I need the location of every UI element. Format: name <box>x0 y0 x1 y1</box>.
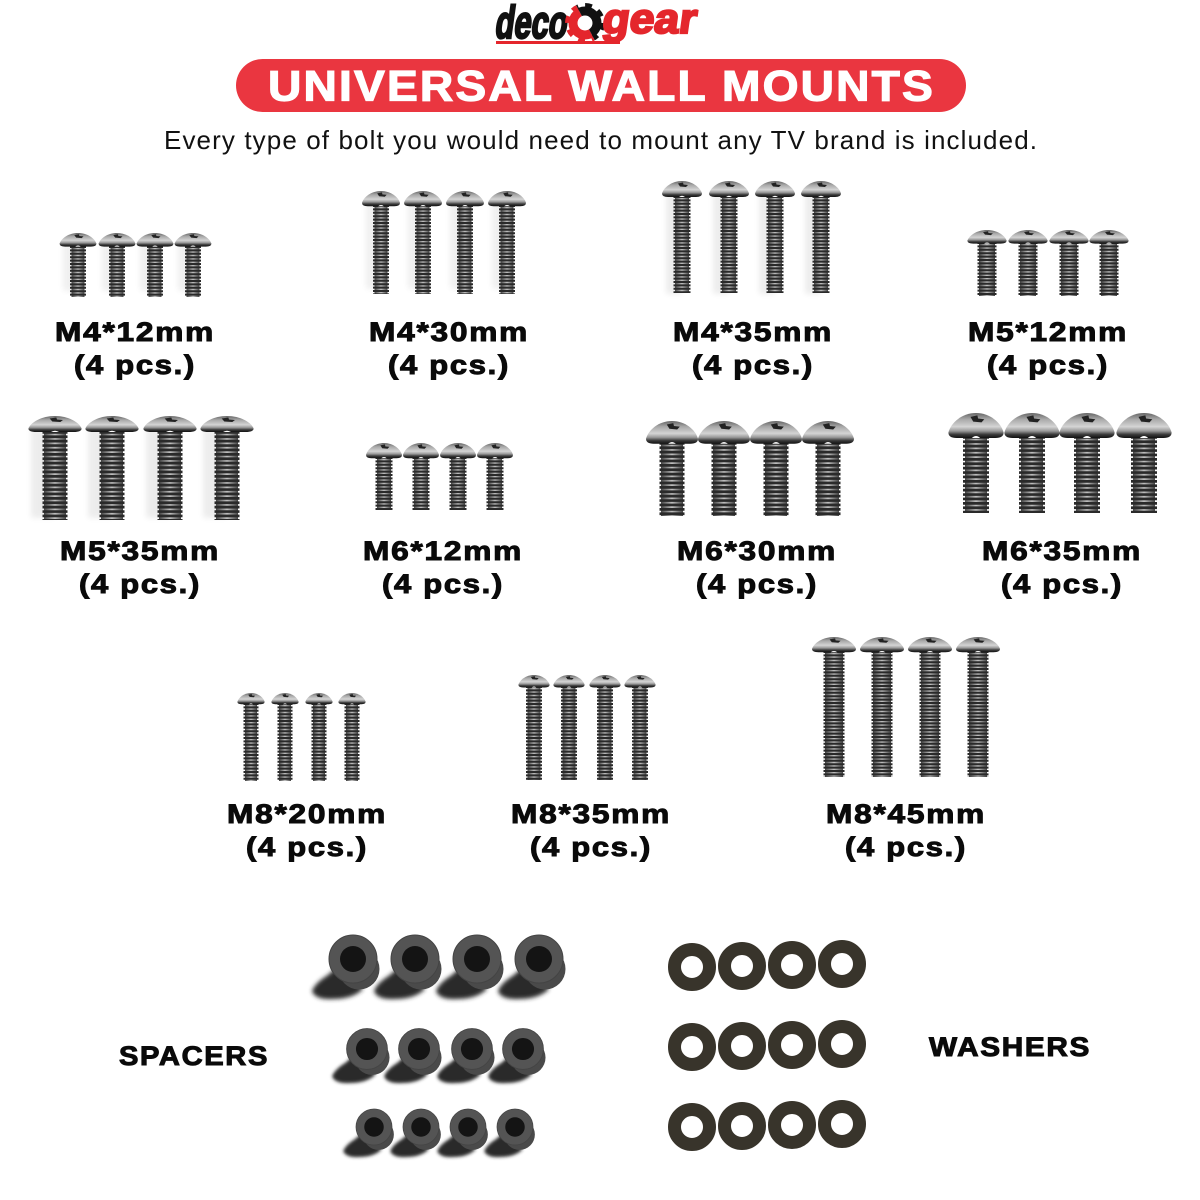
item: M8*45mm <box>812 637 1000 862</box>
size label: M8*20mm <box>227 799 387 829</box>
screws <box>366 443 513 510</box>
washers: bottom row <box>674 1106 860 1144</box>
size label: (4 pcs.) <box>74 350 196 380</box>
logo: Deco Gear <box>496 3 699 44</box>
size label: M5*35mm <box>60 536 220 566</box>
size label: (4 pcs.) <box>696 569 818 599</box>
washers: middle row <box>674 1026 860 1064</box>
size label <box>677 536 837 599</box>
washers: top row <box>674 946 860 984</box>
item: M8*20mm <box>227 693 387 862</box>
item: M5*12mm <box>967 230 1129 380</box>
size label <box>363 536 523 599</box>
screws <box>646 421 854 516</box>
size label: (4 pcs.) <box>382 569 504 599</box>
size label <box>60 536 220 599</box>
size label <box>968 317 1128 380</box>
title banner: UNIVERSAL WALL MOUNTS <box>268 62 935 110</box>
screws <box>518 675 656 780</box>
screws <box>362 191 526 294</box>
size label: (4 pcs.) <box>1001 569 1123 599</box>
size label: (4 pcs.) <box>692 350 814 380</box>
subtitle: Every type of bolt you would need to mount any TV brand is included. <box>164 125 1037 155</box>
item: M6*35mm <box>948 413 1172 599</box>
size label: (4 pcs.) <box>987 350 1109 380</box>
size label: M6*30mm <box>677 536 837 566</box>
size label: M6*12mm <box>363 536 523 566</box>
item: M4*35mm <box>662 181 841 380</box>
size label: (4 pcs.) <box>845 832 967 862</box>
spacers: medium row <box>332 1029 546 1083</box>
item: M4*12mm <box>55 233 215 380</box>
size label: (4 pcs.) <box>388 350 510 380</box>
screws <box>967 230 1129 296</box>
screws <box>812 637 1000 777</box>
size label: (4 pcs.) <box>79 569 201 599</box>
size label <box>369 317 529 380</box>
item: M8*35mm <box>511 675 671 862</box>
size label: M8*45mm <box>826 799 986 829</box>
spacers heading: SPACERS <box>119 1041 269 1071</box>
screws <box>28 416 254 520</box>
screws <box>237 693 366 781</box>
size label: (4 pcs.) <box>530 832 652 862</box>
item: M4*30mm <box>362 191 529 380</box>
size label <box>55 317 215 380</box>
size label <box>673 317 833 380</box>
size label <box>982 536 1142 599</box>
size label: M4*12mm <box>55 317 215 347</box>
item: M6*12mm <box>363 443 523 599</box>
item: M6*30mm <box>646 421 854 599</box>
screws <box>60 233 211 297</box>
size label: M4*35mm <box>673 317 833 347</box>
screws <box>662 181 841 294</box>
spacers: large row <box>312 935 566 999</box>
size label <box>511 799 671 862</box>
screws <box>948 413 1172 513</box>
size label <box>826 799 986 862</box>
washers heading: WASHERS <box>929 1032 1091 1062</box>
size label: M6*35mm <box>982 536 1142 566</box>
item: M5*35mm <box>28 416 254 599</box>
size label: M8*35mm <box>511 799 671 829</box>
size label: M4*30mm <box>369 317 529 347</box>
size label: M5*12mm <box>968 317 1128 347</box>
size label <box>227 799 387 862</box>
size label: (4 pcs.) <box>246 832 368 862</box>
spacers: small row <box>343 1109 535 1157</box>
